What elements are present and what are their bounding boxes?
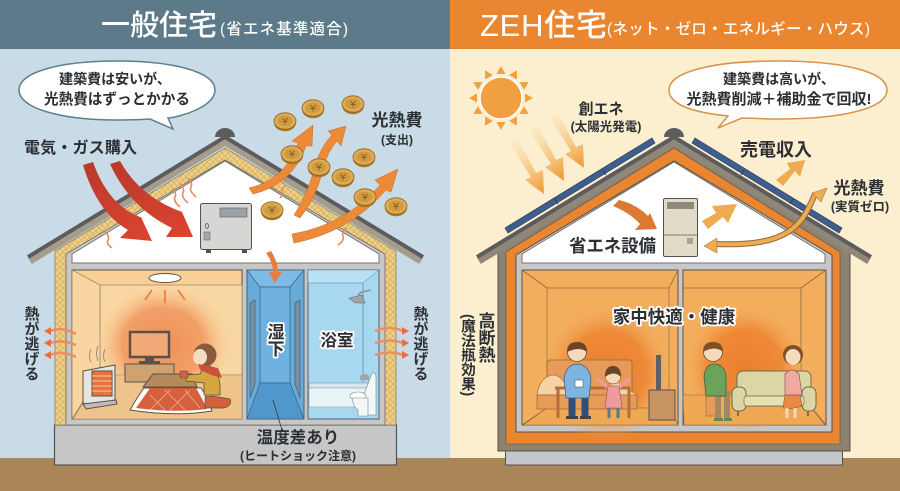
label: temperature gap <box>240 428 356 463</box>
arrow: energy in <box>83 161 193 241</box>
foundation <box>54 425 396 465</box>
shower <box>349 290 371 303</box>
label: selling income: 売電収入 <box>740 140 812 160</box>
arrow: cold air <box>266 251 282 283</box>
label: purchased energy: 電気・ガス購入 <box>24 138 137 157</box>
right background <box>450 0 900 491</box>
label: energy creation: (太陽光発電) <box>571 119 641 134</box>
heading: standard house <box>101 9 348 42</box>
person: father <box>564 342 591 419</box>
callout: low build cost: 建築費は安いが、 <box>59 71 171 87</box>
arrows: heat out right <box>375 327 409 359</box>
roof <box>28 128 423 261</box>
header bar <box>450 0 900 49</box>
attic <box>72 161 379 263</box>
ground <box>450 458 900 491</box>
label: net zero cost: 光熱費 <box>834 179 884 198</box>
header bar <box>0 0 450 49</box>
room: living <box>72 270 242 419</box>
room: bathroom <box>308 270 379 419</box>
panel: ZEH house <box>450 0 900 491</box>
left background <box>0 0 450 491</box>
heading: standard house: 一般住宅 <box>101 9 217 42</box>
arrow: running cost two-way <box>704 188 827 253</box>
ground <box>0 458 450 491</box>
leader line <box>273 400 282 430</box>
label: high insulation: 高断熱 <box>476 311 495 363</box>
room: left family room <box>522 270 678 440</box>
television <box>649 355 675 420</box>
heater <box>83 346 117 409</box>
icon: sun <box>469 66 533 130</box>
bathtub <box>309 374 369 407</box>
label: energy creation: 創エネ <box>578 101 624 118</box>
house: ZEH <box>459 128 889 465</box>
inner wall <box>516 161 832 432</box>
ceiling light <box>145 274 185 303</box>
label: efficient equipment: 省エネ設備 <box>569 236 656 256</box>
inner wall <box>66 160 385 425</box>
callout: high build cost recovered <box>669 61 887 128</box>
callout: high build cost recovered: 光熱費削減＋補助金で回収! <box>686 90 872 108</box>
label: high insulation <box>459 311 495 396</box>
person: man <box>703 342 732 421</box>
label: energy creation <box>571 101 641 134</box>
equipment: energy saving unit <box>664 198 698 256</box>
label: high insulation: (魔法瓶効果) <box>459 314 475 396</box>
heading: standard house: (省エネ基準適合) <box>220 20 348 38</box>
toilet <box>350 373 376 416</box>
outer wall <box>498 143 850 451</box>
label: temperature gap: 温度差あり <box>257 428 339 447</box>
kotatsu <box>130 374 212 414</box>
arrow: into equipment <box>613 200 657 230</box>
label: net zero cost <box>831 179 889 214</box>
foundation <box>506 451 842 465</box>
television <box>125 332 174 382</box>
arrows: running cost out <box>249 125 398 243</box>
label: hallway: 湿下 <box>264 323 284 357</box>
callout: low build cost: 光熱費はずっとかかる <box>44 90 190 108</box>
arrows: heat out left <box>44 327 76 359</box>
callout: low build cost <box>19 61 215 129</box>
person: woman <box>180 344 231 408</box>
label: running cost: 光熱費 <box>372 111 422 130</box>
person: woman <box>783 345 803 418</box>
label: net zero cost: (実質ゼロ) <box>831 199 889 214</box>
label: bathroom: 浴室 <box>320 331 354 350</box>
arrow: out of equipment <box>702 204 737 229</box>
insulation shell <box>55 148 396 425</box>
arrow: selling power <box>776 160 805 186</box>
house: standard <box>22 96 428 465</box>
callout: high build cost recovered: 建築費は高いが、 <box>723 71 835 87</box>
label: running cost: (支出) <box>381 132 413 147</box>
attic <box>522 162 825 263</box>
label: temperature gap: (ヒートショック注意) <box>240 448 356 463</box>
arrows: sunlight <box>510 113 584 194</box>
label: running cost <box>372 111 422 147</box>
room: right family room <box>683 270 826 432</box>
sofa <box>732 371 816 416</box>
heading: ZEH house: (ネット・ゼロ・エネルギー・ハウス) <box>607 20 870 38</box>
yen coins <box>261 96 407 220</box>
heading: ZEH house <box>480 8 870 43</box>
orange insulation <box>506 148 840 444</box>
heat leak squiggles <box>105 178 347 248</box>
label: heat escapes right: 熱が逃げる <box>412 305 428 381</box>
label: comfort: 家中快適・健康 <box>613 307 735 327</box>
label: heat escapes left: 熱が逃げる <box>22 305 40 381</box>
room: hallway <box>247 270 304 419</box>
solar panels <box>505 138 842 233</box>
person: child <box>597 366 630 418</box>
equipment: water heater <box>200 204 252 253</box>
roof <box>477 128 871 261</box>
heading: ZEH house: ZEH住宅 <box>480 8 607 43</box>
sofa and table <box>537 360 637 418</box>
